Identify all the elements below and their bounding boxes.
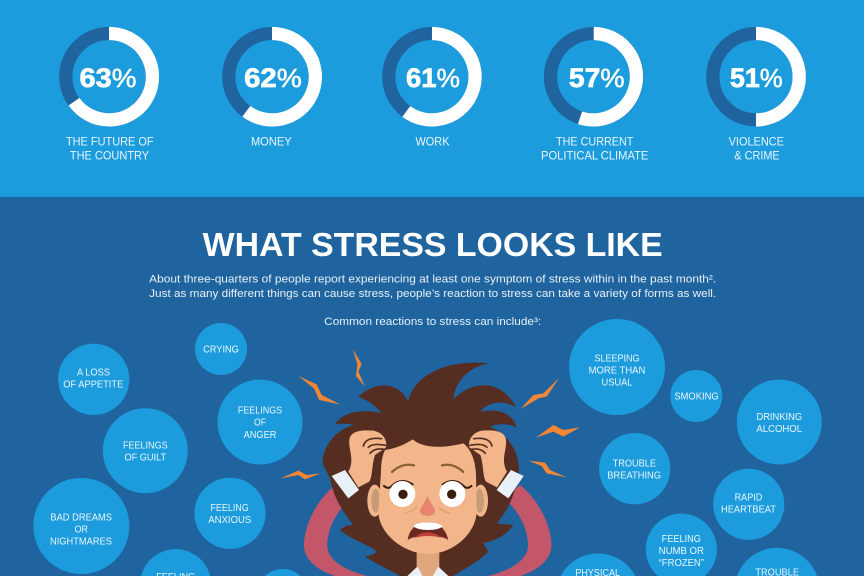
bubble: sleeping more than usual	[569, 319, 665, 415]
eyes	[383, 481, 472, 507]
intro text: Just as many different things can cause stress, people’s reaction to stress can take a variety of forms as well.	[149, 288, 716, 300]
panel: top stressors band	[0, 0, 864, 197]
donut: 57% the current political climate: POLITICAL CLIMATE	[541, 150, 649, 163]
bubble: trouble breathing	[599, 433, 670, 504]
bubble: sleeping more than usual: USUAL	[602, 377, 633, 388]
bubble: sleeping more than usual: SLEEPING	[594, 353, 640, 364]
hands	[348, 430, 507, 487]
donut: 63% the future of the country: THE FUTURE OF	[66, 135, 154, 148]
bubble: rapid heartbeat	[713, 469, 784, 540]
cuffs	[332, 470, 524, 498]
ears	[367, 485, 488, 517]
bubble: feelings of guilt: FEELINGS	[123, 441, 168, 452]
bubble: trouble (cropped)	[737, 548, 817, 576]
donut: 61% work	[389, 33, 475, 148]
bubble: physical (cropped)	[560, 554, 636, 576]
nose	[420, 496, 435, 516]
title: WHAT STRESS LOOKS LIKE	[203, 227, 663, 264]
bubble: smoking: SMOKING	[674, 391, 719, 402]
donut: 61% work: WORK	[416, 135, 450, 148]
bubble: feelings of guilt	[103, 408, 188, 493]
bubble: bad dreams or nightmares: OR	[75, 524, 88, 535]
bubble: crying: CRYING	[203, 344, 239, 355]
bubble: feelings of guilt: OF GUILT	[124, 453, 167, 464]
bubble: feeling anxious	[194, 478, 266, 549]
intro text: About three-quarters of people report experiencing at least one symptom of stress within in the past month².	[149, 274, 716, 286]
bubble: a loss of appetite	[58, 344, 129, 415]
bubble: feeling numb or frozen: NUMB OR	[659, 546, 704, 557]
donut: 63% the future of the country	[66, 33, 154, 163]
bubble: small cropped	[265, 569, 300, 576]
bubble: drinking alcohol	[737, 380, 822, 464]
bubble: a loss of appetite: OF APPETITE	[63, 380, 123, 391]
bubble: bad dreams or nightmares: NIGHTMARES	[50, 536, 112, 547]
neck	[417, 548, 439, 576]
donut: 63% the future of the country: 63%	[80, 63, 136, 93]
illustration: stressed woman	[281, 349, 580, 576]
bubble: a loss of appetite: A LOSS	[77, 367, 110, 378]
arms	[304, 485, 551, 576]
donut: 62% money: 62%	[244, 63, 302, 93]
bubble: crying	[195, 323, 247, 375]
bubble: feelings of anger: FEELINGS	[238, 406, 282, 417]
icon: stress sparks	[281, 349, 580, 479]
bubble: rapid heartbeat: RAPID	[735, 492, 762, 503]
finger lines	[363, 438, 492, 453]
bubble: trouble breathing: BREATHING	[607, 470, 661, 481]
donut: 63% the future of the country: THE COUNTRY	[70, 150, 149, 163]
donut: 57% the current political climate	[541, 33, 649, 163]
bubble: bad dreams or nightmares	[33, 478, 129, 574]
donut: 51% violence and crime: VIOLENCE	[729, 135, 784, 148]
bubble: feeling (cropped)	[141, 549, 210, 576]
donut: 51% violence and crime	[713, 33, 799, 163]
donut: 62% money: MONEY	[251, 135, 292, 148]
bubble: rapid heartbeat: HEARTBEAT	[721, 504, 777, 515]
bubble: drinking alcohol: DRINKING	[756, 412, 802, 423]
bubble: feeling numb or frozen	[646, 514, 717, 576]
donut: 51% violence and crime: & CRIME	[734, 150, 780, 163]
bubble: smoking	[670, 370, 722, 422]
panel: what stress looks like background	[0, 197, 864, 576]
subheading: common reactions: Common reactions to stress can include³:	[324, 316, 541, 328]
donut: 57% the current political climate: THE CURRENT	[556, 135, 633, 148]
under-eye shadows	[405, 507, 450, 513]
bubble: feeling numb or frozen: “FROZEN”	[659, 558, 704, 569]
donut: 51% violence and crime: 51%	[730, 63, 783, 93]
bubble: feelings of anger: OF	[254, 418, 266, 429]
face	[378, 439, 477, 554]
bubble: feelings of anger: ANGER	[244, 430, 277, 441]
bubble: sleeping more than usual: MORE THAN	[589, 365, 645, 376]
collar	[407, 567, 448, 576]
intro text	[149, 274, 716, 300]
eyebrows	[392, 465, 463, 472]
bubble: bad dreams or nightmares: BAD DREAMS	[50, 512, 112, 523]
bubble: trouble breathing: TROUBLE	[613, 458, 656, 469]
hair	[323, 363, 519, 576]
donut: 57% the current political climate: 57%	[569, 63, 625, 93]
donut: 61% work: 61%	[406, 63, 460, 93]
donut: 62% money	[229, 33, 315, 148]
bubble: feeling numb or frozen: FEELING	[662, 534, 701, 545]
mouth	[408, 522, 448, 540]
bubble: drinking alcohol: ALCOHOL	[756, 424, 802, 435]
bubble: feelings of anger	[218, 380, 302, 464]
bubble: feeling anxious: ANXIOUS	[208, 515, 251, 526]
bubble: feeling anxious: FEELING	[210, 503, 249, 514]
